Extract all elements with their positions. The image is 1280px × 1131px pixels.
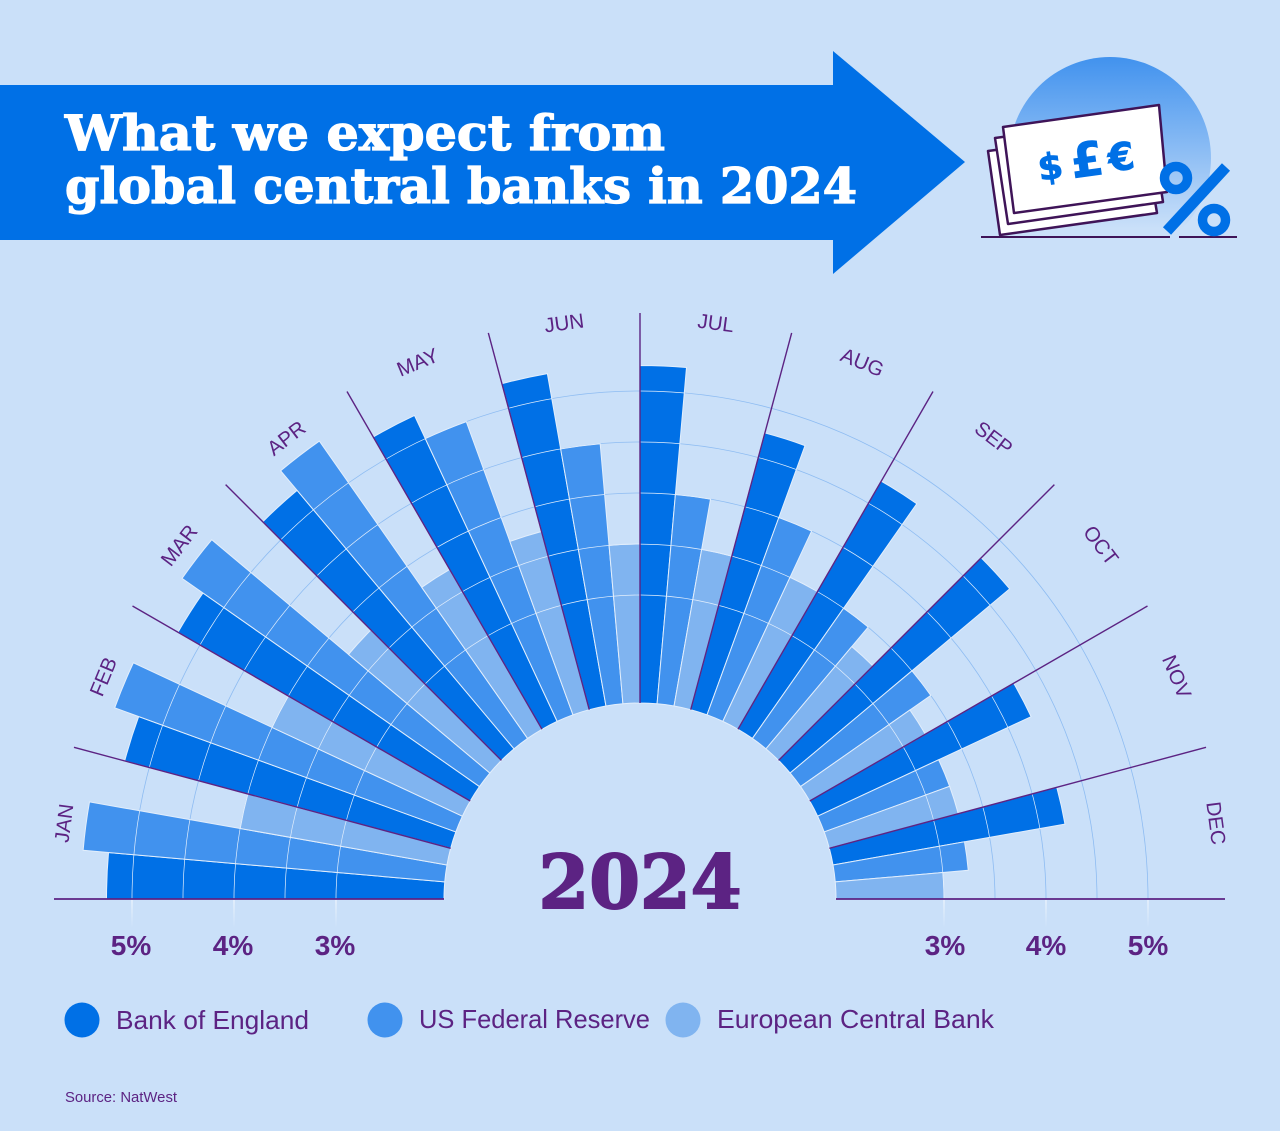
axis percentage labels: 4% [213, 930, 253, 961]
bars: September [738, 481, 918, 768]
month labels [51, 309, 1230, 846]
legend: Bank of England [116, 1005, 309, 1035]
legend [64, 1002, 995, 1038]
icon: banknotes and percent sign: $ [1035, 146, 1066, 190]
bars: February [115, 662, 478, 848]
month labels: FEB [85, 654, 122, 700]
legend: European Central Bank [717, 1004, 995, 1034]
axis percentage labels: 5% [111, 930, 151, 961]
title [64, 104, 857, 215]
bars: April [263, 439, 555, 761]
axis percentage labels: 3% [925, 930, 965, 961]
axis percentage labels: 3% [315, 930, 355, 961]
title: What we expect from [64, 104, 665, 162]
icon: banknotes and percent sign: € [1104, 133, 1137, 181]
bars: August [691, 433, 818, 735]
month labels: OCT [1078, 521, 1123, 570]
month labels: MAR [156, 521, 202, 571]
month labels: DEC [1201, 800, 1230, 846]
month labels: AUG [837, 344, 887, 382]
bars: July [640, 365, 732, 712]
source note: Source: NatWest [65, 1089, 178, 1106]
month labels: JUL [696, 310, 735, 337]
bars: December [829, 787, 1067, 908]
month labels: NOV [1157, 652, 1196, 702]
bars: June [502, 372, 654, 710]
axis ticks below baseline [132, 900, 1148, 928]
axis percentage labels: 5% [1128, 930, 1168, 961]
month labels: JUN [543, 309, 585, 337]
bars: November [809, 683, 1032, 859]
month labels: MAY [394, 344, 442, 382]
radial chart of expected rates [51, 309, 1230, 908]
legend: US Federal Reserve [419, 1004, 650, 1034]
bars: January [83, 794, 454, 899]
bars: October [778, 558, 1011, 811]
center year label: 2024 [538, 840, 742, 926]
axis percentage labels [111, 930, 1168, 961]
bars: May [373, 414, 604, 730]
icon: banknotes and percent sign [981, 57, 1237, 259]
axis percentage labels: 4% [1026, 930, 1066, 961]
month labels: APR [263, 417, 310, 460]
month labels: SEP [970, 417, 1017, 460]
month labels: JAN [51, 803, 78, 844]
icon: banknotes and percent sign: £ [1067, 131, 1107, 190]
title banner arrow [0, 51, 965, 274]
title: global central banks in 2024 [65, 157, 857, 215]
bars: March [178, 538, 512, 801]
